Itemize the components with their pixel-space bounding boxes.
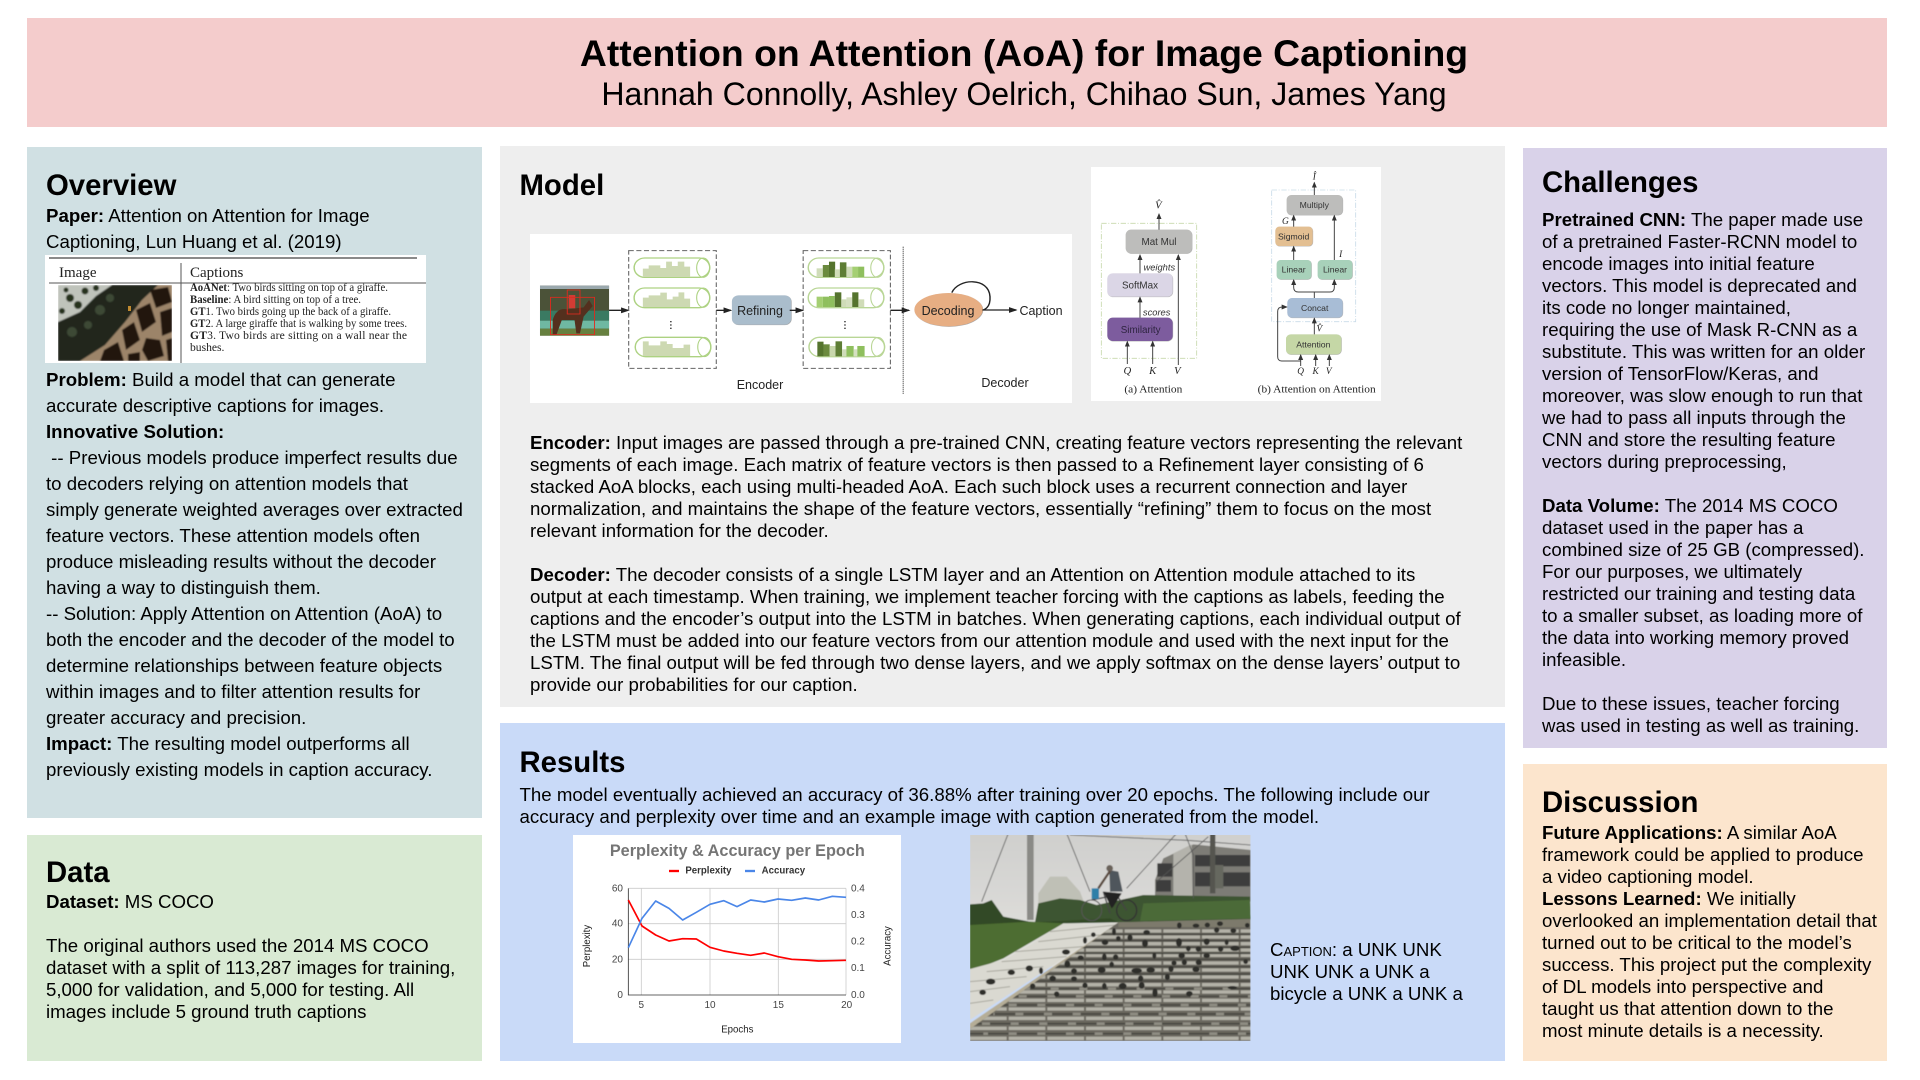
problem, solution, impact text: within images and to filter attention results for: [46, 681, 420, 702]
problem, solution, impact text: simply generate weighted averages over extracted: [46, 499, 463, 520]
attention module: Mat Mul: [1142, 237, 1176, 248]
diagram labels: Decoder: [981, 376, 1029, 390]
panel: overview: [27, 147, 482, 818]
figure: example captions table: GT2. A large giraffe that is walking by some trees.: [190, 317, 407, 330]
encoder and decoder descriptions: LSTM. The final output will be fed through two dense layers, and we apply softmax on the dense layers’ output to: [530, 652, 1460, 673]
discussion text: a video captioning model.: [1542, 866, 1754, 887]
figure: example captions table: Baseline: A bird sitting on top of a tree.: [190, 293, 361, 306]
attention module: V: [1174, 366, 1182, 377]
attention module: [1101, 199, 1197, 396]
refined feature stack: [803, 251, 890, 368]
grid and axes: [628, 888, 846, 995]
axis tick labels: 10: [704, 1000, 716, 1011]
axis tick labels: [612, 883, 865, 1011]
encoder and decoder descriptions: normalization, and maintains the shape of the feature vectors, essentially “refining” them to focus on the most: [530, 498, 1431, 519]
panel: discussion: [1523, 764, 1887, 1061]
generated caption: [1270, 939, 1463, 1004]
attention on attention module: (b) Attention on Attention: [1258, 384, 1376, 396]
problem, solution, impact text: [46, 369, 463, 780]
encoder and decoder descriptions: segments of each image. Each matrix of feature vectors is then passed to a Refinement layer consisting of 6: [530, 454, 1424, 475]
encoder and decoder descriptions: Encoder: Input images are passed through a pre-trained CNN, creating feature vectors representing the relevant: [530, 432, 1462, 453]
challenges text: vectors. This model is deprecated and: [1542, 275, 1857, 296]
challenges text: infeasible.: [1542, 649, 1626, 670]
challenges text: encode images into initial feature: [1542, 253, 1815, 274]
attention module: K: [1148, 366, 1157, 377]
discussion text: turned out to be critical to the model’s: [1542, 932, 1852, 953]
generated caption: UNK UNK a UNK a: [1270, 961, 1430, 982]
reeds: [1038, 876, 1084, 904]
challenges text: Pretrained CNN: The paper made use: [1542, 209, 1863, 230]
attention module: SoftMax: [1122, 281, 1158, 292]
discussion text: success. This project put the complexity: [1542, 954, 1871, 975]
axis tick labels: 0.1: [851, 963, 865, 974]
results summary: The model eventually achieved an accuracy of 36.88% after training over 20 epochs. The following include our: [520, 784, 1430, 805]
attention on attention module: K: [1312, 367, 1320, 377]
problem, solution, impact text: Innovative Solution:: [46, 421, 224, 442]
challenges text: its code no longer maintained,: [1542, 297, 1791, 318]
authors: Hannah Connolly, Ashley Oelrich, Chihao Sun, James Yang: [601, 76, 1447, 112]
diagram labels: [737, 304, 1063, 392]
encoder and decoder descriptions: relevant information for the decoder.: [530, 520, 829, 541]
perplexity line: [628, 900, 846, 961]
diagram labels: Decoding: [922, 304, 974, 318]
attention module: Q: [1123, 366, 1131, 377]
problem, solution, impact text: -- Previous models produce imperfect results due: [51, 447, 458, 468]
challenges text: vectors during preprocessing,: [1542, 451, 1787, 472]
discussion text: overlooked an implementation detail that: [1542, 910, 1877, 931]
figure: example captions table: AoANet: Two birds sitting on top of a giraffe.: [190, 281, 388, 294]
axis tick labels: 0: [617, 990, 623, 1001]
decoding node: [914, 293, 983, 326]
photo: cyclist and pigeons on steps: [970, 835, 1251, 1041]
discussion text: [1542, 822, 1877, 1041]
discussion text: Future Applications: A similar AoA: [1542, 822, 1837, 843]
challenges text: the data into working memory proved: [1542, 627, 1849, 648]
attention module: V̂: [1155, 199, 1163, 212]
discussion text: taught us that attention down to the: [1542, 998, 1833, 1019]
problem, solution, impact text: determine relationships between feature objects: [46, 655, 442, 676]
heading: discussion: Discussion: [1542, 786, 1698, 819]
figure: example captions table: Image: [59, 265, 97, 281]
data description: dataset with a split of 113,287 images for training,: [46, 957, 455, 978]
axis titles: [582, 925, 894, 1035]
challenges text: to a smaller subset, as loading more of: [1542, 605, 1862, 626]
attention on attention module: G: [1282, 217, 1289, 227]
attention on attention module: I: [1338, 250, 1343, 260]
paper citation: Captioning, Lun Huang et al. (2019): [46, 231, 342, 252]
diagram: attention and attention on attention: [1091, 167, 1381, 401]
giraffe photo: [58, 285, 172, 361]
heading: model: Model: [520, 169, 604, 202]
attention on attention module: Q: [1297, 367, 1304, 377]
attention on attention module: V: [1326, 367, 1333, 377]
axis titles: Perplexity: [582, 925, 593, 967]
accuracy line: [628, 896, 846, 948]
panel: results: [500, 723, 1505, 1061]
discussion text: of DL models into perspective and: [1542, 976, 1823, 997]
results summary: [520, 784, 1430, 827]
heading: results: Results: [520, 746, 625, 779]
decoding loop arrow: [952, 282, 990, 310]
diagram labels: Encoder: [737, 378, 783, 392]
problem, solution, impact text: feature vectors. These attention models often: [46, 525, 420, 546]
challenges text: of a pretrained Faster-RCNN model to: [1542, 231, 1857, 252]
legend: Perplexity: [685, 866, 732, 877]
panel: data: [27, 835, 482, 1061]
generated caption: bicycle a UNK a UNK a: [1270, 983, 1463, 1004]
axis tick labels: 5: [639, 1000, 645, 1011]
problem, solution, impact text: Impact: The resulting model outperforms all: [46, 733, 410, 754]
attention module: scores: [1143, 308, 1171, 318]
header banner: [27, 18, 1887, 127]
encoder feature stack: [629, 251, 716, 368]
results summary: accuracy and perplexity over time and an example image with caption generated from the model.: [520, 806, 1319, 827]
attention module: weights: [1144, 262, 1175, 272]
axis tick labels: 60: [612, 883, 623, 894]
challenges text: substitute. This was written for an older: [1542, 341, 1865, 362]
axis titles: Epochs: [721, 1024, 754, 1035]
problem, solution, impact text: produce misleading results without the decoder: [46, 551, 436, 572]
encoder and decoder descriptions: provide our probabilities for our caption.: [530, 674, 858, 695]
axis titles: Accuracy: [883, 926, 894, 966]
challenges text: was used in testing as well as training.: [1542, 715, 1859, 736]
axis tick labels: 0.4: [851, 883, 865, 894]
challenges text: dataset used in the paper has a: [1542, 517, 1803, 538]
axis tick labels: 15: [773, 1000, 784, 1011]
encoder and decoder descriptions: captions and the encoder’s output into the LSTM in batches. When generating captions, each individual output of: [530, 608, 1461, 629]
heading: data: Data: [46, 856, 110, 889]
data description: [46, 891, 455, 1022]
challenges text: For our purposes, we ultimately: [1542, 561, 1802, 582]
encoder and decoder descriptions: Decoder: The decoder consists of a single LSTM layer and an Attention on Attention module attached to its: [530, 564, 1415, 585]
paper citation: Paper: Attention on Attention for Image: [46, 205, 370, 226]
diagram: encoder decoder pipeline: [530, 234, 1072, 403]
cyclist: [1082, 865, 1137, 921]
poles: [1027, 833, 1034, 920]
encoder and decoder descriptions: output at each timestamp. When training, we implement teacher forcing with the captions as labels, feeding the: [530, 586, 1445, 607]
legend: Accuracy: [762, 866, 806, 877]
axis tick labels: 0.3: [851, 910, 865, 921]
challenges text: moreover, was slow enough to run that: [1542, 385, 1862, 406]
challenges text: requiring the use of Mask R-CNN as a: [1542, 319, 1857, 340]
challenges text: [1542, 209, 1865, 736]
figure: example captions table: GT3. Two birds are sitting on a wall near the: [190, 329, 407, 342]
attention on attention module: Multiply: [1300, 200, 1330, 210]
legend: [669, 866, 806, 877]
problem, solution, impact text: greater accuracy and precision.: [46, 707, 306, 728]
discussion text: most minute details is a necessity.: [1542, 1020, 1824, 1041]
problem, solution, impact text: Problem: Build a model that can generate: [46, 369, 395, 390]
heading: overview: Overview: [46, 169, 176, 202]
attention on attention module: Attention: [1296, 339, 1331, 349]
challenges text: combined size of 25 GB (compressed).: [1542, 539, 1864, 560]
generated caption: Caption: a UNK UNK: [1270, 939, 1442, 960]
stairs: [970, 918, 1251, 1042]
figure: example captions table: bushes.: [190, 341, 225, 354]
attention on attention module: V̂: [1316, 322, 1323, 335]
problem, solution, impact text: to decoders relying on attention models that: [46, 473, 408, 494]
challenges text: Data Volume: The 2014 MS COCO: [1542, 495, 1838, 516]
challenges text: version of TensorFlow/Keras, and: [1542, 363, 1819, 384]
discussion text: framework could be applied to produce: [1542, 844, 1864, 865]
axis tick labels: 0.2: [851, 937, 865, 948]
input photo: [540, 286, 609, 336]
diagram labels: Caption: [1019, 304, 1063, 318]
data description: Dataset: MS COCO: [46, 891, 214, 912]
attention module: Similarity: [1121, 325, 1161, 336]
challenges text: restricted our training and testing data: [1542, 583, 1855, 604]
diagram labels: Refining: [737, 304, 783, 318]
data description: images include 5 ground truth captions: [46, 1001, 366, 1022]
attention on attention module: Concat: [1301, 303, 1329, 313]
line chart: perplexity and accuracy: Perplexity & Accuracy per Epoch: [610, 842, 865, 860]
overhead wires: [982, 833, 1251, 902]
problem, solution, impact text: having a way to distinguish them.: [46, 577, 321, 598]
building: [1155, 844, 1251, 902]
discussion text: Lessons Learned: We initially: [1542, 888, 1796, 909]
white blocks: [970, 922, 1118, 1020]
panel: challenges: [1523, 148, 1887, 748]
encoder and decoder descriptions: [530, 432, 1462, 695]
axis tick labels: 20: [612, 954, 623, 965]
data description: 5,000 for validation, and 5,000 for testing. All: [46, 979, 414, 1000]
title: Attention on Attention (AoA) for Image Captioning: [580, 32, 1468, 74]
panel: model: [500, 146, 1505, 707]
challenges text: we had to pass all inputs through the: [1542, 407, 1846, 428]
line chart: perplexity and accuracy: [573, 835, 901, 1043]
axis tick labels: 20: [841, 1000, 853, 1011]
attention on attention module: Sigmoid: [1278, 231, 1309, 241]
data description: The original authors used the 2014 MS COCO: [46, 935, 429, 956]
problem, solution, impact text: accurate descriptive captions for images.: [46, 395, 384, 416]
attention on attention module: Linear: [1282, 265, 1306, 275]
challenges text: Due to these issues, teacher forcing: [1542, 693, 1840, 714]
pigeons: [979, 921, 1250, 997]
axis tick labels: 0.0: [851, 990, 865, 1001]
refining block: [732, 295, 791, 325]
attention on attention module: Î: [1312, 170, 1317, 182]
paper citation: [46, 205, 370, 252]
axis tick labels: 40: [612, 919, 623, 930]
figure: example captions table: Captions: [190, 265, 243, 281]
challenges text: CNN and store the resulting feature: [1542, 429, 1835, 450]
encoder and decoder descriptions: the LSTM must be added into our feature vectors from our attention module and used with the next input for the: [530, 630, 1449, 651]
attention module: (a) Attention: [1124, 384, 1183, 396]
heading: challenges: Challenges: [1542, 166, 1698, 199]
problem, solution, impact text: previously existing models in caption accuracy.: [46, 759, 432, 780]
grass bank: [970, 900, 1118, 926]
figure: example captions table: [45, 255, 426, 363]
attention on attention module: Linear: [1323, 265, 1347, 275]
problem, solution, impact text: both the encoder and the decoder of the model to: [46, 629, 455, 650]
problem, solution, impact text: -- Solution: Apply Attention on Attention (AoA) to: [46, 603, 442, 624]
attention on attention module: [1258, 170, 1376, 396]
figure: example captions table: GT1. Two birds going up the back of a giraffe.: [190, 305, 391, 318]
encoder and decoder descriptions: stacked AoA blocks, each using multi-headed AoA. Each such block uses a recurrent connection and layer: [530, 476, 1407, 497]
